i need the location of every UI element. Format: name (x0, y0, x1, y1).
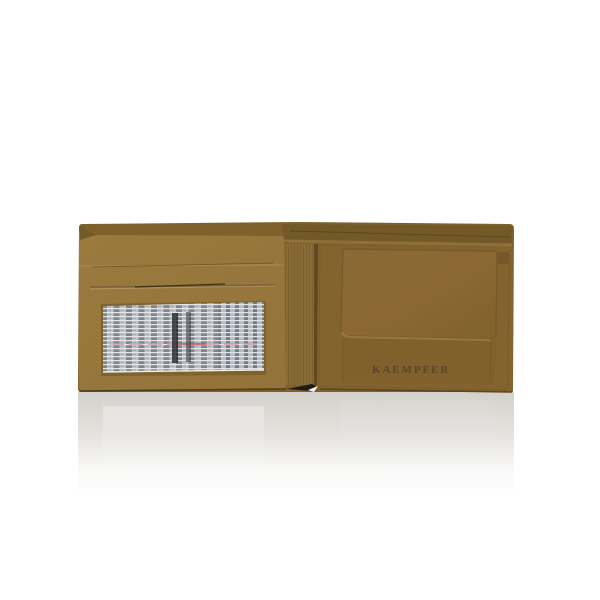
card slot 1 (79, 263, 284, 267)
panel: coin pocket flap (341, 249, 497, 340)
panel: right interior (317, 246, 513, 392)
wallet back body (78, 222, 514, 392)
slot right of flap (497, 252, 509, 264)
lower pocket (342, 338, 496, 385)
lower edge shadow (80, 389, 286, 391)
card slot 2 (90, 284, 275, 289)
wallet (78, 222, 514, 392)
id window plaid (103, 302, 264, 372)
spine with ribs (284, 244, 314, 385)
reflection (78, 392, 514, 498)
plaid dark stripe (172, 313, 178, 363)
corner (80, 226, 96, 240)
id window frame (101, 301, 266, 376)
spine gap (287, 384, 316, 391)
brand text: KAEMPFER (372, 364, 450, 376)
stitching (319, 250, 509, 390)
plaid red stripe (110, 343, 262, 345)
panel: left card flap (79, 226, 286, 391)
top inner edge strip (282, 224, 512, 243)
